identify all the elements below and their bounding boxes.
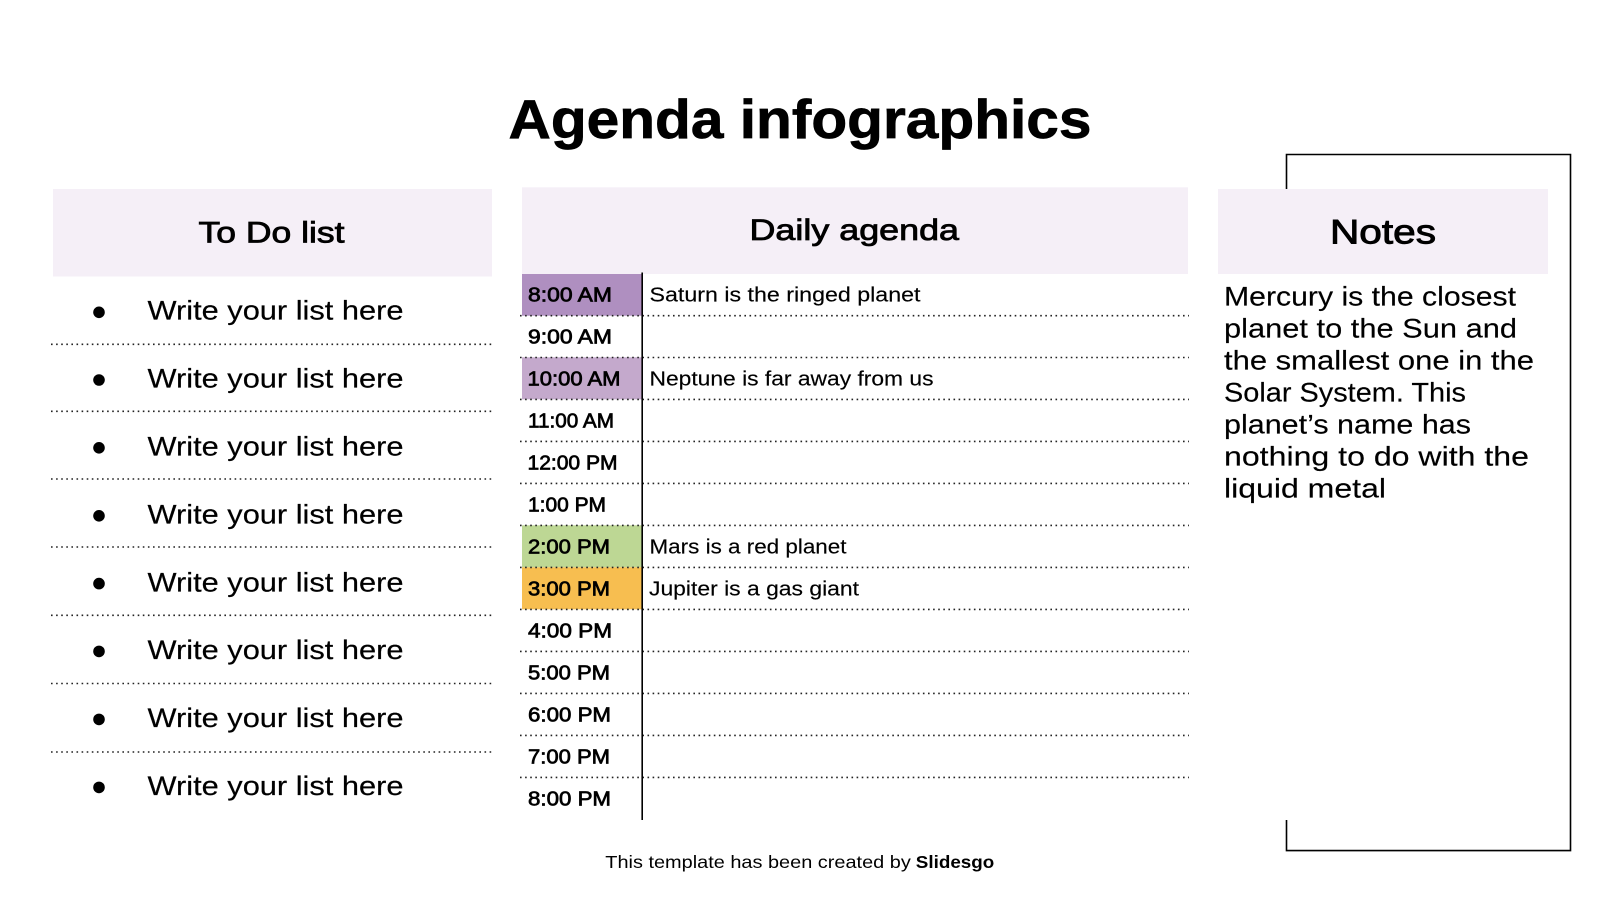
time labels (528, 285, 620, 811)
notes body text (1224, 282, 1534, 504)
time labels: 7:00 PM (528, 747, 610, 769)
notes body text: the smallest one in the (1224, 346, 1534, 376)
notes body text: Mercury is the closest (1224, 282, 1517, 312)
time labels: 4:00 PM (528, 621, 612, 643)
time labels: 6:00 PM (528, 705, 611, 727)
footer credit (605, 852, 994, 872)
agenda entries: Jupiter is a gas giant (649, 579, 860, 601)
highlighted time cells (522, 274, 642, 609)
time labels: 10:00 AM (528, 369, 620, 391)
footer credit: Slidesgo (916, 852, 994, 872)
notes body text: liquid metal (1224, 474, 1386, 504)
time labels: 5:00 PM (528, 663, 610, 685)
time labels: 1:00 PM (528, 495, 606, 517)
notes header: Notes (1330, 213, 1436, 251)
time labels: 9:00 AM (528, 327, 612, 349)
daily agenda header: Daily agenda (750, 214, 960, 247)
to do items: Write your list here (148, 703, 404, 733)
agenda entries: Mars is a red planet (650, 537, 847, 559)
time labels: 8:00 PM (528, 789, 611, 811)
to do items: Write your list here (148, 567, 404, 597)
notes body text: planet to the Sun and (1224, 314, 1517, 344)
footer credit: This template has been created by (605, 852, 911, 872)
to do header: To Do list (198, 217, 344, 250)
daily agenda header (522, 187, 1188, 274)
panel: notes (1218, 154, 1570, 851)
agenda entries (649, 285, 934, 601)
to do items: Write your list here (148, 363, 404, 393)
notes body text: nothing to do with the (1224, 442, 1529, 472)
notes body text: Solar System. This (1224, 378, 1466, 408)
to do items: Write your list here (148, 295, 404, 325)
title: Agenda infographics (508, 89, 1092, 150)
notes bracket frame (1286, 154, 1570, 851)
notes header (1218, 189, 1548, 274)
time labels: 12:00 PM (528, 453, 618, 475)
time labels: 8:00 AM (528, 285, 612, 307)
time labels: 3:00 PM (528, 579, 610, 601)
panel: daily agenda (520, 187, 1189, 820)
to do header (53, 189, 492, 276)
time labels: 2:00 PM (528, 537, 610, 559)
panel: to do list (51, 189, 493, 801)
to do items: Write your list here (148, 635, 404, 665)
agenda entries: Neptune is far away from us (650, 369, 934, 391)
notes body text: planet’s name has (1224, 410, 1471, 440)
time labels: 11:00 AM (528, 411, 614, 433)
to do items: Write your list here (148, 499, 404, 529)
time axis line (641, 272, 643, 820)
to do items (51, 295, 493, 801)
to do items: Write your list here (148, 771, 404, 801)
row dividers (520, 316, 1189, 777)
agenda entries: Saturn is the ringed planet (650, 285, 921, 307)
to do items: Write your list here (148, 431, 404, 461)
